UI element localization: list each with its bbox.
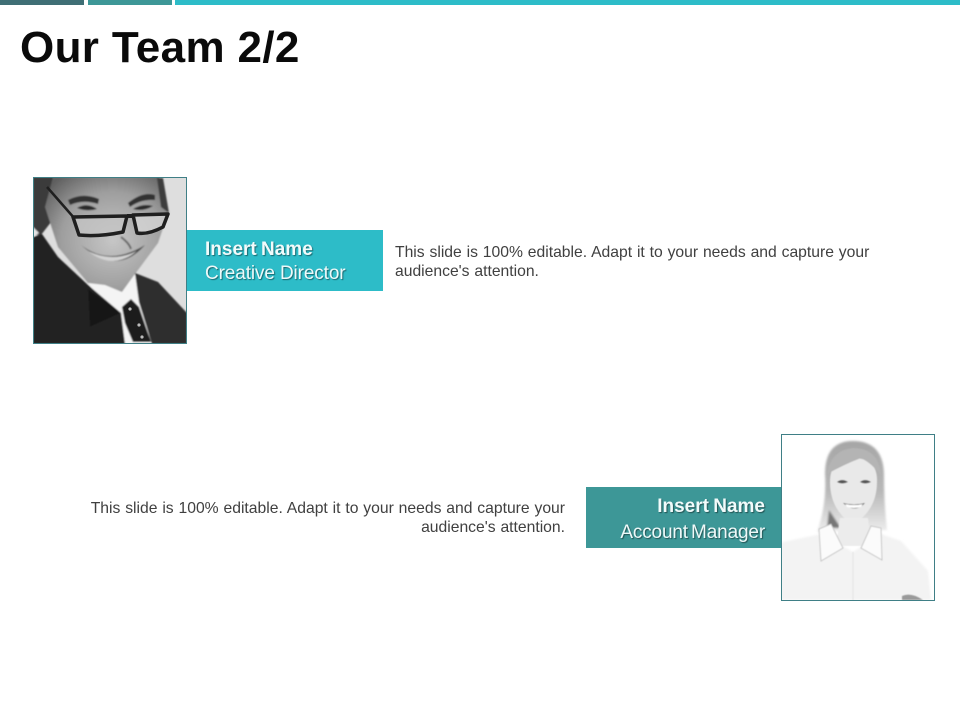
name: Insert Name bbox=[657, 496, 765, 517]
panel: creative director bbox=[33, 177, 870, 344]
name: Insert Name bbox=[205, 239, 313, 260]
top accent bar bbox=[0, 0, 960, 5]
description: This slide is 100% editable. Adapt it to your needs and capture your bbox=[395, 244, 869, 261]
description: audience's attention. bbox=[421, 519, 565, 536]
bar segment: mid teal bbox=[88, 0, 172, 5]
portrait: smiling woman bbox=[781, 434, 935, 601]
bar segment: dark teal bbox=[0, 0, 84, 5]
name banner bbox=[187, 230, 383, 291]
bar segment: bright teal bbox=[175, 0, 960, 5]
portrait: man with glasses bbox=[33, 177, 187, 344]
name banner bbox=[586, 487, 782, 548]
role: Creative Director bbox=[205, 263, 346, 284]
description: This slide is 100% editable. Adapt it to your needs and capture your bbox=[91, 500, 565, 517]
role: Account Manager bbox=[620, 522, 765, 543]
title: Our Team 2/2 bbox=[20, 23, 300, 72]
description bbox=[395, 244, 870, 280]
description bbox=[91, 500, 565, 536]
description: audience's attention. bbox=[395, 263, 539, 280]
panel: account manager bbox=[91, 434, 935, 601]
